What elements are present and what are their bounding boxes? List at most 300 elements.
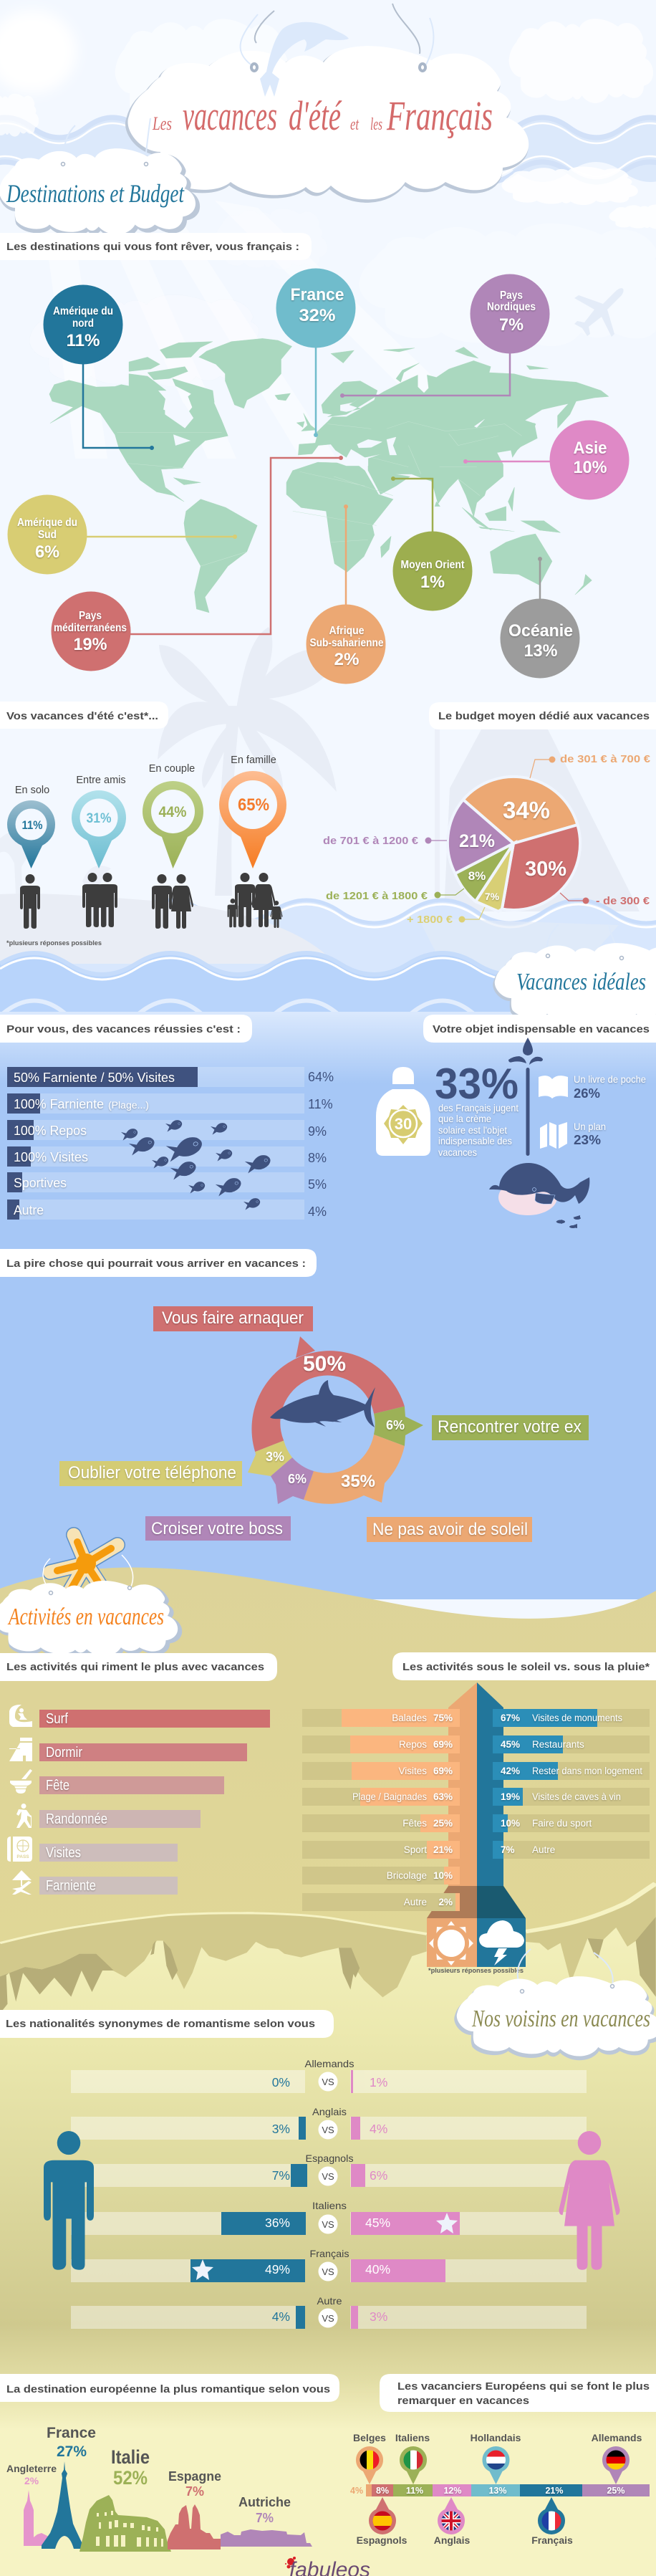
bubble: Amérique du Sud: Sud xyxy=(38,529,57,541)
bubble: Pays Nordiques: Pays xyxy=(500,289,523,302)
stacked bar: noticed vacationers: 25% xyxy=(607,2486,625,2496)
bar tracks xyxy=(7,1067,304,1220)
labels: Italie xyxy=(111,2446,150,2489)
bar: Visites: Visites xyxy=(46,1845,81,1861)
VS badges xyxy=(318,2072,338,2327)
bar labels: (Plage...) xyxy=(108,1100,149,1111)
rain activity bars: 10% xyxy=(501,1818,520,1829)
bubble: Pays méditerranéens xyxy=(52,592,130,671)
bar labels: 100% Visites xyxy=(14,1150,88,1164)
world map xyxy=(49,338,609,613)
rain activity bars: Rester dans mon logement xyxy=(532,1766,642,1776)
labels: Angleterre xyxy=(6,2463,57,2486)
whale with spout xyxy=(489,1038,589,1228)
men bars xyxy=(190,2117,307,2329)
donut percentages: 6% xyxy=(288,1472,307,1486)
bubble: Amérique du Sud: Amérique du xyxy=(17,517,77,529)
heading: destinations xyxy=(0,233,312,260)
bar percentages xyxy=(308,1070,334,1219)
sun activity bars: 2% xyxy=(438,1897,453,1907)
icon: passport: PASS xyxy=(16,1854,29,1859)
map: Eurasia, Greenland and Arctic xyxy=(129,338,609,517)
dolphin xyxy=(260,22,349,97)
segment: arnaque 50 percent xyxy=(251,1336,405,1452)
men values: 0% xyxy=(272,2075,290,2089)
budget pie chart: 8% xyxy=(468,869,486,883)
destination connectors xyxy=(83,348,551,634)
slice: over 1800 xyxy=(476,843,513,911)
heading: vacanciers remarquer: remarquer en vacances xyxy=(397,2395,529,2407)
donut label: téléphone: Oublier votre téléphone xyxy=(68,1463,236,1483)
title text: vacances xyxy=(183,92,277,139)
icon: mortar xyxy=(10,1769,32,1794)
bar: Dormir: Dormir xyxy=(46,1745,82,1761)
item: map xyxy=(540,1121,606,1149)
pin: En famille xyxy=(219,755,286,868)
footnote: *plusieurs réponses possibles xyxy=(6,939,102,947)
icon: shark xyxy=(270,1380,375,1427)
pin: Anglais: Anglais xyxy=(434,2534,470,2546)
slice: 1201 to 1800 xyxy=(455,843,513,901)
labels: France: France xyxy=(47,2425,96,2441)
bar labels xyxy=(14,1071,175,1217)
donut percentages xyxy=(266,1352,405,1491)
chart: romantisme hommes femmes: VS xyxy=(322,2077,334,2087)
legend: 1201 to 1800 xyxy=(326,889,464,902)
segment: pas de soleil 35 percent xyxy=(304,1435,405,1504)
men values: 49% xyxy=(265,2262,290,2276)
row labels: Français xyxy=(309,2248,349,2259)
donut percentages: 6% xyxy=(386,1418,405,1432)
deep water background xyxy=(0,1012,656,1599)
stacked bar: noticed vacationers xyxy=(350,2432,650,2546)
budget pie chart: 30% xyxy=(525,858,566,881)
sun activity bars: Repos xyxy=(399,1739,427,1750)
landmark: Austrian palace xyxy=(221,2529,312,2547)
icon: passport xyxy=(7,1837,32,1862)
rain activity bars: Restaurants xyxy=(532,1739,584,1750)
heading: objet indispensable: Votre objet indispensable en vacances xyxy=(433,1023,650,1035)
icon: beach chair xyxy=(12,1870,32,1895)
rain activity bars: Visites de caves à vin xyxy=(532,1791,621,1802)
heading: soleil vs pluie xyxy=(392,1652,656,1680)
item: map: Un plan xyxy=(574,1121,606,1132)
pin: En famille: 65% xyxy=(238,795,269,815)
bubble: Moyen Orient: Moyen Orient xyxy=(401,559,464,571)
sun activity bars: 75% xyxy=(433,1713,453,1723)
people: couple xyxy=(152,874,193,929)
pin: En couple: 44% xyxy=(159,804,187,820)
rain activity bars: 42% xyxy=(501,1766,520,1776)
chart: romantisme hommes femmes: VS xyxy=(322,2266,334,2277)
heading: vacances réussies: Pour vous, des vacances réussies c'est : xyxy=(6,1023,241,1035)
statistic: 33 percent: que la crème xyxy=(438,1113,491,1124)
bubble: Asie: 10% xyxy=(573,458,607,477)
bubble: Pays méditerranéens: méditerranéens xyxy=(54,622,127,634)
bar labels: 100% Farniente xyxy=(14,1097,104,1111)
section cloud: Nos voisins en vacances xyxy=(455,1949,656,2060)
heading: destinations: Les destinations qui vous font rêver, vous français : xyxy=(6,241,299,253)
heading: vacanciers remarquer xyxy=(380,2374,656,2412)
statistic: 33 percent: des Français jugent xyxy=(438,1102,518,1114)
heading: la pire chose xyxy=(0,1249,317,1277)
bubble: Amérique du nord: 11% xyxy=(66,331,100,350)
donut chart: worst things xyxy=(248,1336,423,1504)
segment: oublier téléphone 3 percent xyxy=(248,1440,292,1476)
people pictograms xyxy=(20,873,282,929)
statistic: 33 percent: 33% xyxy=(435,1060,518,1108)
statistic: 33 percent: solaire est l'objet xyxy=(438,1124,507,1136)
men values: 4% xyxy=(272,2309,290,2324)
title text: les xyxy=(370,115,382,134)
landmark: Colosseum xyxy=(79,2495,171,2552)
men values: 3% xyxy=(272,2122,290,2136)
pin: Italiens xyxy=(395,2432,430,2484)
bubble: Océanie xyxy=(500,599,580,678)
stacked bar: noticed vacationers: 4% xyxy=(350,2486,363,2496)
pin: Belges xyxy=(353,2432,386,2484)
sun glow xyxy=(0,10,77,93)
section cloud: Vacances idéales xyxy=(493,924,656,1026)
donut label: soleil: Ne pas avoir de soleil xyxy=(372,1520,528,1539)
budget pie chart: 21% xyxy=(459,831,495,851)
bubble: Amérique du nord: Amérique du xyxy=(53,305,113,317)
map: Americas, Africa and Oceania xyxy=(49,380,592,613)
sun activity bars: 69% xyxy=(433,1766,453,1776)
section cloud: Activités en vacances xyxy=(0,1555,182,1659)
sun rays xyxy=(43,201,458,459)
bar labels: 100% Repos xyxy=(14,1124,87,1138)
rain activity bars: Autre xyxy=(532,1844,555,1855)
budget pie chart xyxy=(448,777,580,911)
chart: romantisme hommes femmes: VS xyxy=(322,2313,334,2324)
sun activity bars: Visites xyxy=(398,1766,427,1776)
labels: France xyxy=(47,2425,96,2460)
arrow: pluie xyxy=(477,1682,526,1967)
icon: starfish xyxy=(50,1535,117,1598)
slice: 701 to 1200 xyxy=(448,800,513,873)
budget legend xyxy=(323,753,651,926)
bubble: Amérique du nord: nord xyxy=(72,317,94,330)
pin: En famille: En famille xyxy=(231,755,276,766)
bar percentages: 11% xyxy=(308,1097,333,1111)
slice: 301 to 700 xyxy=(463,777,577,843)
pins: who you travel with xyxy=(7,755,286,868)
bar fills xyxy=(7,1067,198,1220)
bar percentages: 8% xyxy=(308,1151,327,1165)
bubble: Asie xyxy=(550,420,629,500)
rain activity bars: 19% xyxy=(501,1791,520,1802)
pin: En solo: En solo xyxy=(15,785,49,796)
rain activity bars: Faire du sport xyxy=(532,1818,592,1829)
connector end dots xyxy=(150,393,542,561)
bubble: Amérique du Sud: 6% xyxy=(35,542,59,562)
bar: Randonnée xyxy=(39,1810,201,1828)
row labels: Anglais xyxy=(312,2106,347,2117)
heading: destination romantique xyxy=(0,2374,339,2402)
bubble: France: 32% xyxy=(299,306,335,325)
icon: hiker xyxy=(16,1804,32,1828)
bubble: Moyen Orient xyxy=(392,532,473,611)
pin: En solo xyxy=(7,785,55,868)
item: pocket book xyxy=(539,1073,646,1101)
heading: activités: Les activités qui riment le plus avec vacances xyxy=(6,1661,264,1673)
bubble: Afrique Sub-saharienne xyxy=(307,605,385,684)
donut percentages: 3% xyxy=(266,1450,284,1464)
women values: 45% xyxy=(365,2216,390,2230)
heading: budget: Le budget moyen dédié aux vacances xyxy=(438,710,650,722)
bar: Fête: Fête xyxy=(46,1778,69,1794)
legend: 301 to 700: de 301 € à 700 € xyxy=(560,753,651,765)
destination bubbles xyxy=(7,268,629,684)
icon: sunscreen bottle: 30 xyxy=(395,1115,412,1133)
pin: Allemands xyxy=(592,2432,642,2484)
segment: croiser boss 6 percent xyxy=(271,1457,314,1504)
people: family xyxy=(228,873,282,928)
bar: Fête xyxy=(39,1776,224,1794)
legend: over 1800: + 1800 € xyxy=(407,914,453,926)
bar: Dormir xyxy=(39,1743,247,1761)
bar labels: Sportives xyxy=(14,1176,67,1190)
pin: Entre amis: Entre amis xyxy=(76,775,126,786)
bar: Visites xyxy=(39,1844,178,1862)
title cloud xyxy=(126,4,529,201)
women values: 3% xyxy=(370,2309,387,2324)
sun activity bars: 69% xyxy=(433,1739,453,1750)
stars xyxy=(192,2213,458,2280)
pin: Italiens: Italiens xyxy=(395,2432,430,2443)
bar: Farniente xyxy=(39,1877,178,1895)
sky and wave band background xyxy=(0,0,656,932)
icon: surf xyxy=(9,1705,32,1727)
pin: Hollandais xyxy=(471,2432,521,2484)
landmark: Eiffel tower xyxy=(42,2461,82,2549)
stacked bar: noticed vacationers: 13% xyxy=(488,2486,507,2496)
people: friends xyxy=(82,873,117,927)
plane icon xyxy=(574,288,624,337)
bar: Farniente: Farniente xyxy=(46,1878,96,1894)
heading: soleil vs pluie: Les activités sous le soleil vs. sous la pluie* xyxy=(402,1661,650,1673)
chart: soleil vs pluie arrows xyxy=(427,1682,526,1967)
bubble: Afrique Sub-saharienne: Afrique xyxy=(329,625,365,637)
bubble: Océanie: Océanie xyxy=(508,621,573,641)
sun activity bars: 25% xyxy=(433,1818,453,1829)
legend: 701 to 1200: de 701 € à 1200 € xyxy=(323,835,419,847)
rain activity bars: 7% xyxy=(501,1844,515,1855)
icon: hotel xyxy=(9,1738,32,1761)
bubble: Afrique Sub-saharienne: 2% xyxy=(334,650,360,669)
donut percentages: 50% xyxy=(303,1352,346,1376)
heading: romantisme xyxy=(0,2010,334,2038)
bar chart: vacances réussies xyxy=(7,1067,334,1220)
row labels: Italiens xyxy=(312,2200,347,2211)
women values: 1% xyxy=(370,2075,387,2089)
heading: romantisme: Les nationalités synonymes de romantisme selon vous xyxy=(6,2018,315,2030)
section cloud: Destinations et Budget xyxy=(0,118,200,238)
chart: romantisme hommes femmes: VS xyxy=(322,2171,334,2182)
palm tree silhouette xyxy=(0,627,337,924)
pin: Anglais xyxy=(434,2497,470,2546)
statistic: 33 percent xyxy=(435,1060,518,1158)
bar labels: Autre xyxy=(14,1203,44,1217)
donut percentages: 35% xyxy=(341,1472,375,1491)
women values: 6% xyxy=(370,2168,387,2183)
statistic: 33 percent: indispensable des xyxy=(438,1135,512,1146)
bubble: Pays Nordiques: Nordiques xyxy=(487,301,536,313)
bar percentages: 64% xyxy=(308,1070,334,1084)
legend: 1201 to 1800: de 1201 € à 1800 € xyxy=(326,890,428,902)
labels: Autriche: 7% xyxy=(256,2511,274,2525)
section cloud: Activités en vacances: Activités en vacances xyxy=(8,1604,164,1630)
pin: Hollandais: Hollandais xyxy=(471,2432,521,2443)
bubble: Afrique Sub-saharienne: Sub-saharienne xyxy=(309,637,384,649)
heading: activités xyxy=(0,1653,277,1681)
bar percentages: 4% xyxy=(308,1205,327,1219)
school of fish xyxy=(121,1119,272,1210)
stacked bar: noticed vacationers: 8% xyxy=(376,2486,389,2496)
map: internal borders xyxy=(117,432,377,566)
footnote: soleil pluie: *plusieurs réponses possibles xyxy=(428,1967,524,1975)
bubble: France: France xyxy=(291,285,344,305)
activity icons xyxy=(7,1705,32,1895)
pin: Français: Français xyxy=(531,2534,573,2546)
labels: Autriche: Autriche xyxy=(238,2495,291,2509)
stacked bar: noticed vacationers: 12% xyxy=(443,2486,462,2496)
romantic destinations xyxy=(6,2425,312,2552)
landmark: Sagrada Familia xyxy=(168,2504,221,2549)
legend: under 300: - de 300 € xyxy=(596,895,650,907)
heading: destination romantique: La destination européenne la plus romantique selon vous xyxy=(6,2383,330,2395)
legend: over 1800 xyxy=(407,907,485,926)
waves and island xyxy=(0,894,656,1032)
title text xyxy=(152,92,493,139)
person: solo xyxy=(20,874,40,929)
slice: under 300 xyxy=(502,825,580,910)
sun activity bars: Plage / Baignades xyxy=(352,1791,427,1802)
stacked bar: noticed vacationers: 11% xyxy=(406,2486,423,2496)
labels: Angleterre: 2% xyxy=(24,2475,39,2486)
heading: vacances réussies xyxy=(0,1015,252,1043)
heading: vos vacances xyxy=(0,702,168,729)
bubble: Pays Nordiques: 7% xyxy=(499,315,524,335)
chart: romantisme hommes femmes xyxy=(44,2058,620,2329)
figure: man xyxy=(44,2131,94,2270)
row labels: Espagnols xyxy=(305,2153,354,2164)
item: pocket book: 26% xyxy=(574,1086,600,1101)
sun activity bars: 21% xyxy=(433,1844,453,1855)
rain activity bars: 67% xyxy=(501,1713,520,1723)
sky clouds xyxy=(0,19,656,387)
bar: Surf: Surf xyxy=(46,1711,68,1727)
heading: la pire chose: La pire chose qui pourrait vous arriver en vacances : xyxy=(6,1258,306,1270)
bar percentages: 9% xyxy=(308,1124,327,1139)
budget pie chart: 34% xyxy=(503,797,550,823)
legend: under 300 xyxy=(560,893,650,907)
bubble: Amérique du Sud xyxy=(7,494,87,575)
pin: Entre amis xyxy=(72,775,126,868)
bubble: Pays Nordiques xyxy=(470,274,550,354)
sailing boat background xyxy=(435,729,640,912)
pin: Espagnols: Espagnols xyxy=(357,2534,407,2546)
bubble: Amérique du nord xyxy=(43,285,123,364)
women values xyxy=(365,2075,390,2324)
rain activity bars xyxy=(493,1709,650,1859)
budget pie chart: 7% xyxy=(485,891,500,902)
title text: Français xyxy=(386,92,493,139)
segment: rencontrer ex 6 percent xyxy=(374,1407,423,1446)
legend: 301 to 700 xyxy=(530,753,651,778)
dark sand drips and beach line xyxy=(0,1883,656,2014)
sun activity bars: 10% xyxy=(433,1870,453,1881)
pin: En couple: En couple xyxy=(149,763,195,775)
bubble: Pays méditerranéens: 19% xyxy=(73,635,107,654)
bubble: Océanie: 13% xyxy=(524,641,557,661)
men values: 36% xyxy=(265,2216,290,2230)
sun activity bars: 63% xyxy=(433,1791,453,1802)
title text: et xyxy=(350,115,360,134)
title strings xyxy=(241,4,433,71)
statistic: 33 percent: vacances xyxy=(438,1146,477,1158)
item: pocket book: Un livre de poche xyxy=(574,1073,646,1085)
sun activity bars: Balades xyxy=(392,1713,427,1723)
bar: Randonnée: Randonnée xyxy=(46,1811,107,1827)
lower pale background xyxy=(0,1877,656,2576)
heading: objet indispensable xyxy=(423,1015,656,1043)
sun activity bars: Autre xyxy=(404,1897,427,1907)
labels: Espagne: 7% xyxy=(185,2484,204,2499)
pin: Allemands: Allemands xyxy=(592,2432,642,2443)
donut label: arnaquer: Vous faire arnaquer xyxy=(162,1308,304,1328)
pin: En solo: 11% xyxy=(21,818,43,832)
figure: woman xyxy=(559,2131,620,2270)
labels: Angleterre: Angleterre xyxy=(6,2463,57,2474)
sun activity bars xyxy=(302,1709,460,1911)
rain activity bars: 45% xyxy=(501,1739,520,1750)
bar chart: activities xyxy=(39,1710,270,1895)
row labels: Autre xyxy=(317,2295,342,2307)
arrow: soleil xyxy=(427,1682,477,1967)
chart: romantisme hommes femmes: VS xyxy=(322,2125,334,2135)
women values: 40% xyxy=(365,2262,390,2276)
section cloud: Destinations et Budget: Destinations et Budget xyxy=(6,179,185,208)
donut label: ex: Rencontrer votre ex xyxy=(438,1417,582,1437)
row labels xyxy=(305,2058,354,2307)
heading: vacanciers remarquer: Les vacanciers Européens qui se font le plus xyxy=(397,2380,650,2393)
bubble: France xyxy=(276,268,355,348)
sand xyxy=(0,1567,656,1942)
heading: budget xyxy=(429,702,656,729)
bar labels: 50% Farniente / 50% Visites xyxy=(14,1071,175,1085)
pin: Belges: Belges xyxy=(353,2432,386,2443)
men values: 7% xyxy=(272,2168,290,2183)
women values: 4% xyxy=(370,2122,387,2136)
labels: Espagne xyxy=(168,2469,221,2499)
sun activity bars: Sport xyxy=(404,1844,427,1855)
bubble: Moyen Orient: 1% xyxy=(420,573,445,592)
heading: vos vacances: Vos vacances d'été c'est*... xyxy=(6,710,158,722)
item: map: 23% xyxy=(574,1133,601,1147)
bar: Surf xyxy=(39,1710,270,1728)
title text: Les xyxy=(152,113,172,134)
pin: Entre amis: 31% xyxy=(86,811,112,826)
men values xyxy=(265,2075,290,2324)
stacked bar: noticed vacationers: 21% xyxy=(545,2486,564,2496)
bar percentages: 5% xyxy=(308,1177,327,1192)
rain activity bars: Visites de monuments xyxy=(532,1713,622,1723)
sun activity bars: Bricolage xyxy=(387,1870,427,1881)
chart: romantisme hommes femmes: VS xyxy=(322,2219,334,2230)
sun activity bars: Fêtes xyxy=(402,1818,427,1829)
